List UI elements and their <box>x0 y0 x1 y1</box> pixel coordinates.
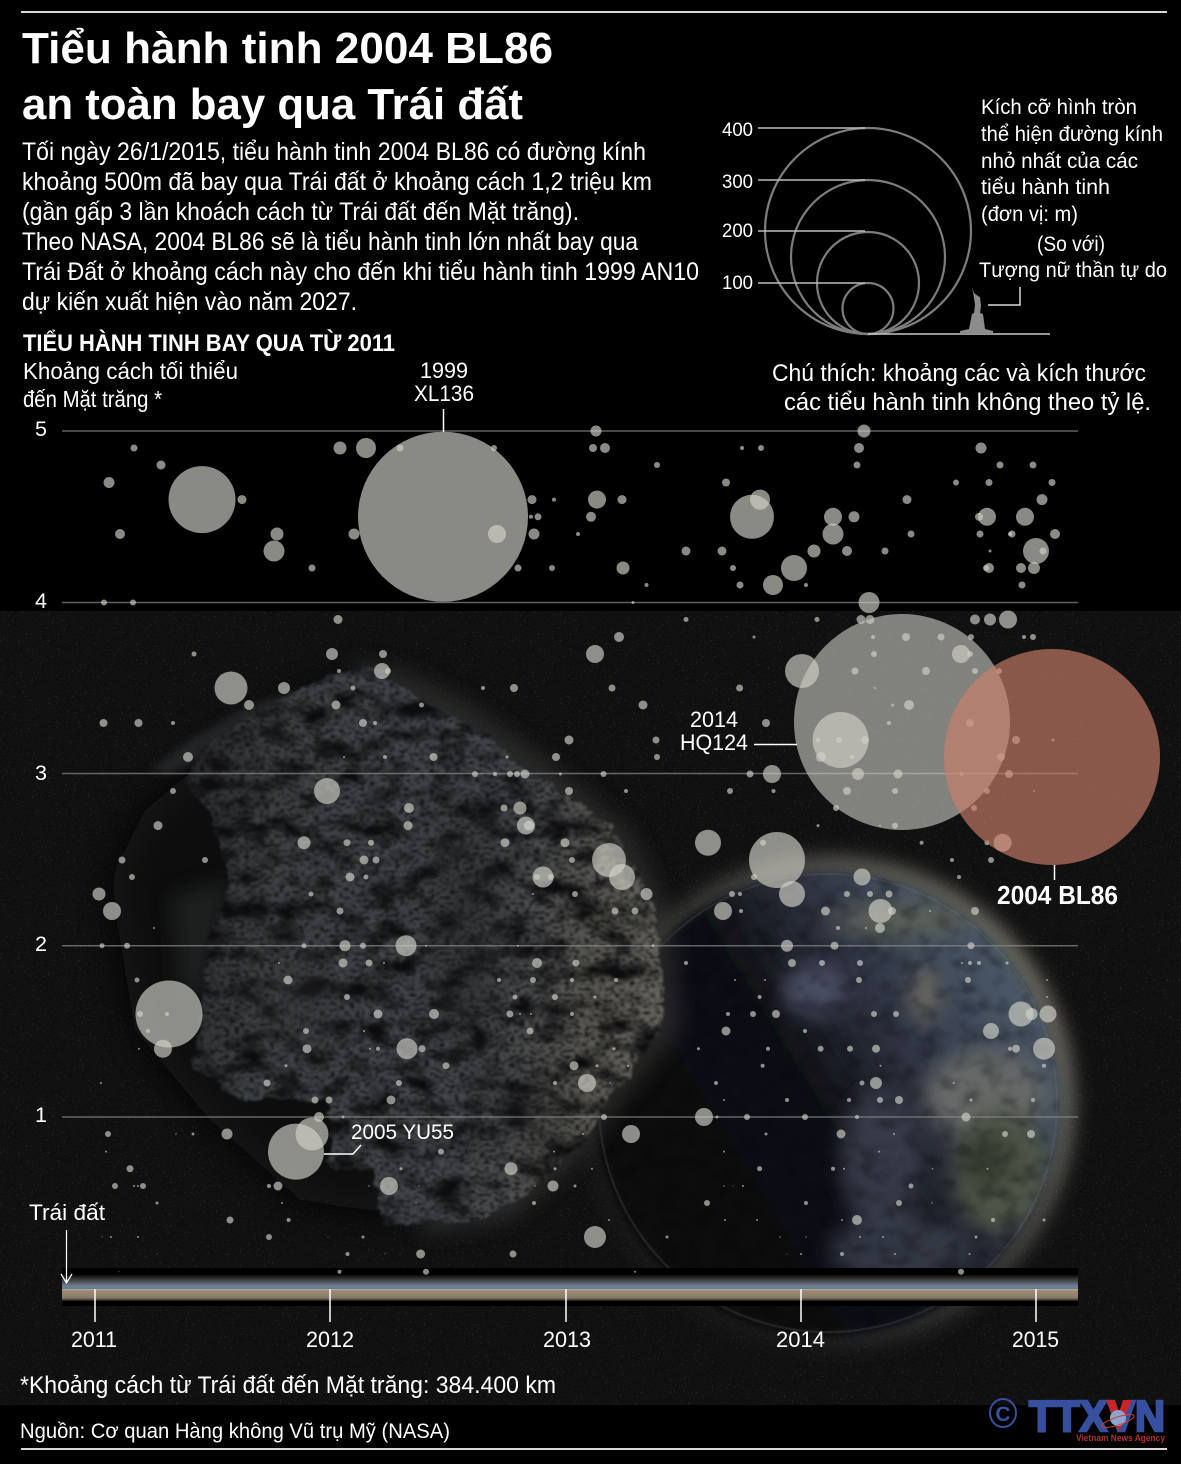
logo: TTXVN: Vietnam News Agency <box>1076 1433 1165 1443</box>
timeline year labels: 2014 <box>776 1327 825 1352</box>
bubble: 2014 HQ124 <box>794 614 1010 830</box>
y-axis labels: 2 <box>35 933 47 956</box>
intro paragraph: Trái Đất ở khoảng cách này cho đến khi tiểu hành tinh 1999 AN10 <box>22 258 699 286</box>
icon: Statue of Liberty <box>960 287 993 334</box>
timeline year labels <box>71 1327 1059 1352</box>
y-axis labels: 4 <box>35 590 47 613</box>
legend explanation: thể hiện đường kính <box>981 123 1163 146</box>
footnote: *Khoảng cách từ Trái đất đến Mặt trăng: 384.400 km <box>20 1372 556 1399</box>
y-axis labels: 5 <box>35 418 47 441</box>
y-axis labels <box>35 418 47 1127</box>
bubble: 2004 BL86 <box>944 649 1160 865</box>
top rule <box>21 11 1167 13</box>
label and arrow: Earth <box>29 1200 105 1283</box>
title: an toàn bay qua Trái đất <box>22 80 523 129</box>
intro paragraph: dự kiến xuất hiện vào năm 2027. <box>22 288 357 316</box>
legend: circle size scale: 200 <box>722 221 753 242</box>
label: 2005 YU55 <box>324 1121 454 1154</box>
label: 1999 XL136: 1999 <box>420 358 468 383</box>
y-axis labels: 3 <box>35 762 47 785</box>
title <box>22 24 553 129</box>
logo: TTXVN: TTXVN <box>1029 1392 1165 1441</box>
legend explanation: tiểu hành tinh <box>981 176 1110 199</box>
legend explanation <box>979 96 1167 282</box>
logo: TTXVN: C <box>995 1403 1011 1426</box>
bottom rule <box>21 1448 1167 1450</box>
intro paragraph: khoảng 500m đã bay qua Trái đất ở khoảng cách 1,2 triệu km <box>22 168 652 196</box>
Earth <box>590 860 1070 1350</box>
y-axis title: đến Mặt trăng * <box>23 386 162 412</box>
label: 1999 XL136: XL136 <box>414 381 474 406</box>
title: Tiểu hành tinh 2004 BL86 <box>22 24 553 73</box>
timeline year ticks <box>95 1289 1036 1322</box>
timeline year labels: 2013 <box>543 1327 591 1352</box>
legend: circle size scale <box>722 120 1050 334</box>
label: 2014 HQ124 <box>680 707 797 755</box>
statue pointer <box>988 287 1020 305</box>
timeline year labels: 2012 <box>306 1327 354 1352</box>
intro paragraph <box>22 138 699 316</box>
legend explanation: (So với) <box>1037 233 1105 256</box>
asteroid bubbles <box>92 424 1060 1275</box>
y-axis title: Khoảng cách tối thiểu <box>23 358 238 384</box>
legend explanation: Kích cỡ hình tròn <box>981 96 1137 119</box>
legend explanation: nhỏ nhất của các <box>981 150 1138 173</box>
timeline band: Earth surface <box>62 1268 1078 1306</box>
label: 2005 YU55: 2005 YU55 <box>351 1121 454 1144</box>
legend: circle size scale: 300 <box>722 172 753 193</box>
chart heading: TIỂU HÀNH TINH BAY QUA TỪ 2011 <box>23 329 395 357</box>
label and arrow: Earth: Trái đất <box>29 1200 105 1225</box>
timeline year labels: 2015 <box>1012 1327 1059 1352</box>
scale note <box>772 360 1151 416</box>
source: Nguồn: Cơ quan Hàng không Vũ trụ Mỹ (NASA) <box>20 1420 450 1443</box>
legend explanation: Tượng nữ thần tự do <box>979 259 1167 282</box>
scale note: các tiểu hành tinh không theo tỷ lệ. <box>784 389 1151 416</box>
label: 2004 BL86: 2004 BL86 <box>997 880 1118 910</box>
label: 2004 BL86 <box>997 865 1118 910</box>
legend: circle size scale: 400 <box>722 120 753 141</box>
intro paragraph: Theo NASA, 2004 BL86 sẽ là tiểu hành tinh lớn nhất bay qua <box>22 228 638 256</box>
label: 2014 HQ124: HQ124 <box>680 730 748 755</box>
y-axis labels: 1 <box>35 1104 47 1127</box>
footer band <box>0 1405 1181 1464</box>
scale note: Chú thích: khoảng các và kích thước <box>772 360 1146 387</box>
legend explanation: (đơn vị: m) <box>981 203 1078 226</box>
Asteroid <box>110 660 680 1235</box>
legend: circle size scale: 100 <box>722 273 753 294</box>
y-axis title <box>23 358 238 412</box>
label: 2014 HQ124: 2014 <box>690 707 738 732</box>
timeline year labels: 2011 <box>71 1327 117 1352</box>
intro paragraph: Tối ngày 26/1/2015, tiểu hành tinh 2004 BL86 có đường kính <box>22 138 646 166</box>
intro paragraph: (gần gấp 3 lần khoách cách từ Trái đất đến Mặt trăng). <box>22 198 579 226</box>
space photo backdrop: asteroid and Earth <box>0 611 1181 1405</box>
gridlines <box>62 431 1078 1117</box>
label: 1999 XL136 <box>414 358 474 432</box>
